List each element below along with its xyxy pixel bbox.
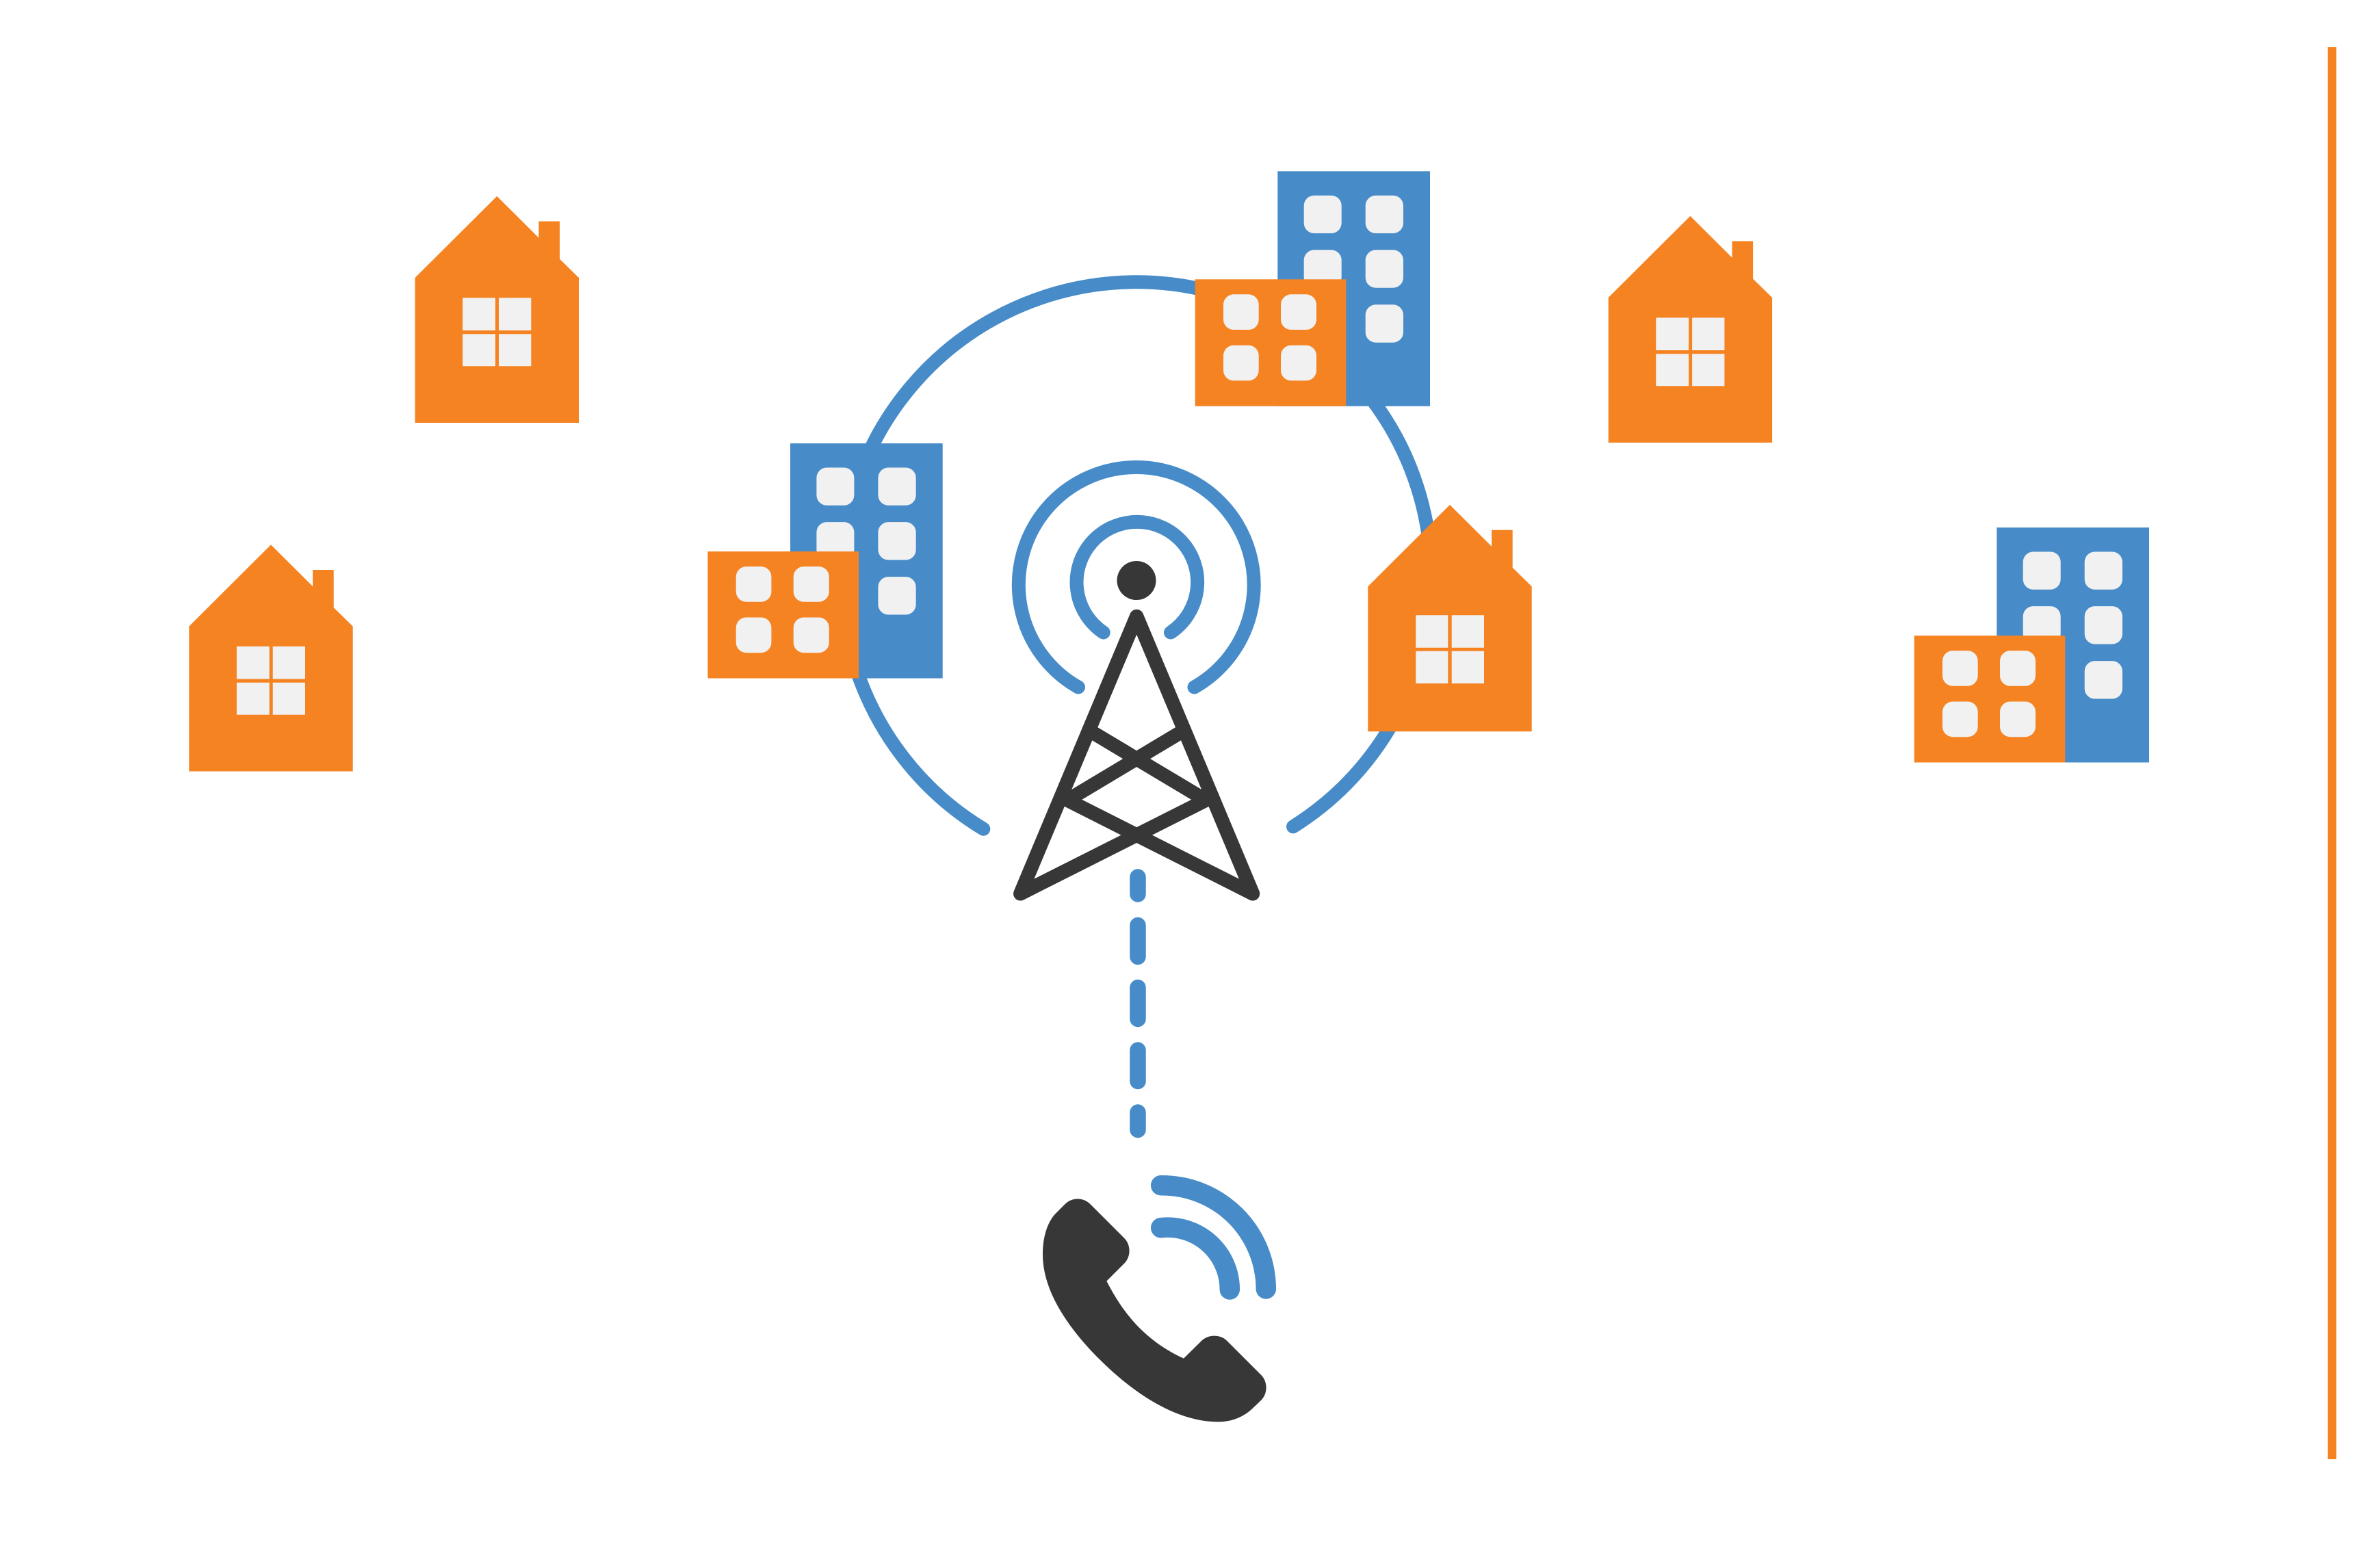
house: upper right xyxy=(1609,216,1772,443)
coverage ring around tower xyxy=(842,282,1431,829)
icon: radio tower with signal waves xyxy=(1019,467,1254,893)
buildings: far right xyxy=(1914,527,2149,762)
house: on ring, right of tower xyxy=(1368,505,1532,731)
vertical orange divider at right edge xyxy=(2328,47,2336,1459)
inner call arc xyxy=(1161,1227,1230,1290)
inner signal wave xyxy=(1077,522,1197,632)
outer signal wave xyxy=(1019,467,1254,687)
buildings: top of ring xyxy=(1195,171,1430,406)
tower lattice xyxy=(1020,616,1253,893)
outer call arc xyxy=(1161,1186,1266,1289)
house: upper left xyxy=(415,196,579,423)
antenna dot xyxy=(1117,561,1156,600)
house: far left xyxy=(189,545,353,772)
handset xyxy=(1043,1199,1266,1422)
buildings: left of ring xyxy=(707,443,943,679)
icon: telephone handset with signal arcs xyxy=(1043,1186,1266,1422)
dashed connection from tower to phone xyxy=(1130,877,1146,1130)
